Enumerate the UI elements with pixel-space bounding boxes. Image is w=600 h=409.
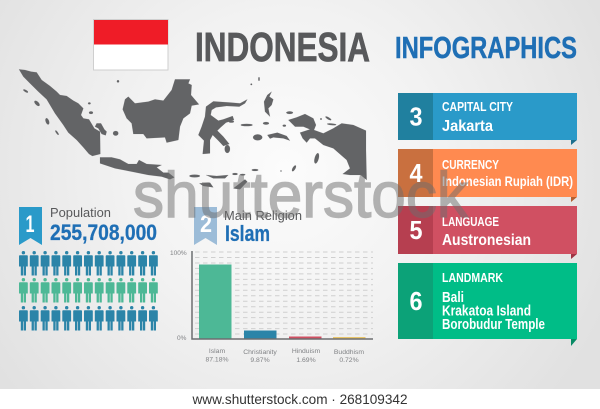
category labels: 87.18%	[205, 356, 229, 364]
category labels: Hinduism	[292, 348, 320, 355]
panel: capital city	[398, 93, 577, 145]
bar: Hinduism	[289, 336, 322, 338]
map of Indonesia	[19, 69, 367, 189]
western islands	[19, 69, 199, 179]
footer credit: www.shutterstock.com · 268109342	[192, 391, 408, 407]
bar: Christianity	[244, 330, 276, 338]
panel: capital city: CAPITAL CITY	[442, 99, 513, 114]
category labels: 1.69%	[296, 357, 316, 364]
category labels: 0.72%	[339, 357, 359, 364]
panel: landmark: Krakatoa Island	[442, 304, 531, 320]
population label: Population	[50, 205, 111, 220]
panel: language: 5	[410, 215, 422, 245]
category labels: Buddhism	[334, 349, 364, 356]
title: Indonesia: INDONESIA	[195, 24, 370, 70]
main religion value: Islam	[225, 221, 270, 246]
eastern islands	[189, 77, 367, 189]
panel: currency: Indonesian Rupiah (IDR)	[442, 173, 573, 189]
category labels: Christianity	[243, 349, 277, 356]
people pictogram rows	[19, 251, 158, 330]
chart axes	[192, 251, 373, 339]
panel: currency: 4	[410, 158, 423, 188]
ribbon 2	[194, 207, 217, 245]
ribbon 1: 1	[26, 211, 34, 238]
panel: landmark: 6	[410, 286, 422, 316]
panel: currency	[398, 149, 577, 202]
panel: language	[398, 206, 577, 259]
panel: capital city: Jakarta	[442, 118, 493, 135]
axis labels: 100%	[170, 250, 187, 257]
flag of Indonesia	[94, 20, 168, 70]
category labels: Islam	[209, 348, 225, 355]
panel: landmark: Borobudur Temple	[442, 317, 545, 333]
ribbon 1	[19, 207, 42, 245]
axis labels	[170, 250, 187, 342]
panel: currency: CURRENCY	[442, 157, 499, 172]
ribbon 2: 2	[200, 211, 212, 238]
panel: landmark	[398, 263, 577, 346]
bar chart: religions	[170, 250, 373, 364]
category labels: 9.87%	[250, 357, 270, 364]
population value: 255,708,000	[50, 220, 157, 245]
main religion label: Main Religion	[224, 208, 302, 223]
watermark: shutterstock	[133, 159, 469, 231]
panel: landmark: Bali	[442, 290, 464, 306]
panel: language: Austronesian	[442, 232, 531, 249]
panel: capital city: 3	[410, 102, 422, 132]
panel: language: LANGUAGE	[442, 214, 499, 229]
category labels	[205, 348, 364, 364]
bar: Buddhism	[333, 337, 366, 338]
bar: Islam	[199, 264, 232, 338]
axis labels: 0%	[177, 335, 187, 342]
panel: landmark: LANDMARK	[442, 270, 503, 285]
